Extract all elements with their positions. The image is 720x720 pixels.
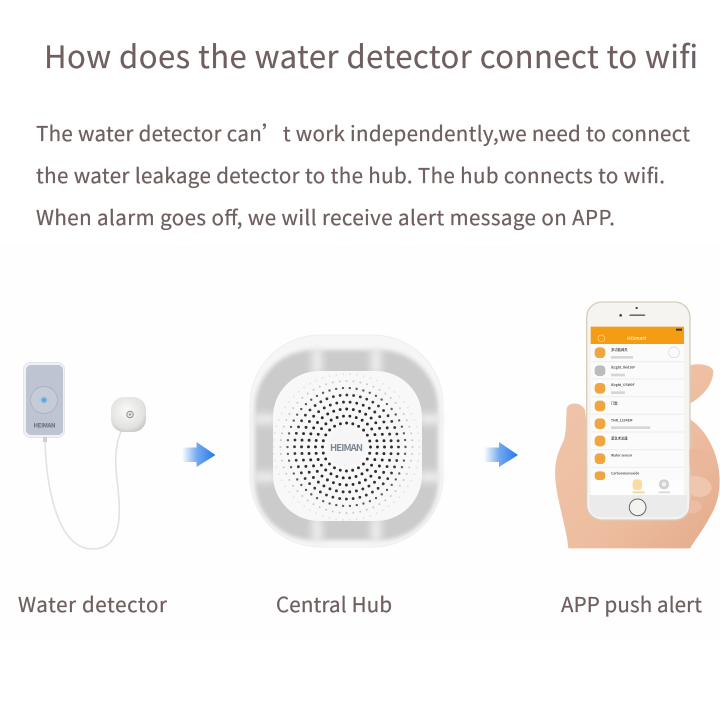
app row labels: 多功能网关 (611, 347, 628, 352)
app row labels (611, 347, 639, 475)
label: central hub: Central Hub (276, 588, 392, 618)
icon: hand holding phone with app (555, 302, 720, 548)
cable (45, 415, 130, 549)
label: app push alert: APP push alert (561, 588, 702, 618)
text block: description: the water leakage detector to the hub. The hub connects to wifi. (36, 159, 665, 189)
app row labels: iEzgbt_Ikid10F (611, 364, 635, 369)
app row labels: THR_1234EM (611, 418, 633, 423)
app list rows (591, 361, 684, 468)
arrow: detector to hub (182, 442, 216, 467)
title: How does the water detector connect to wifi (44, 32, 698, 77)
icon: water detector device (24, 362, 146, 549)
phone body (587, 302, 690, 520)
app row labels: iEzgbt_O3W0F (611, 382, 635, 387)
text block: description: When alarm goes off, we will receive alert message on APP. (36, 201, 615, 231)
phone chin (589, 495, 687, 517)
hub outer shell (250, 335, 443, 547)
text block: description: The water detector can’t work independently,we need to connect (36, 117, 690, 147)
detector body: HEIMAN (34, 420, 56, 430)
app header (591, 327, 684, 344)
hub light ring (254, 348, 441, 542)
app row labels: 紧急求总器 (611, 435, 628, 440)
app row icons (595, 347, 605, 480)
text block: description (36, 117, 690, 231)
phone screen (591, 327, 684, 495)
hub speaker plate (273, 371, 422, 521)
icon: central hub (250, 335, 443, 547)
hand (555, 364, 720, 548)
fingers over phone (689, 449, 716, 513)
phone speaker and camera (619, 307, 645, 317)
add button (669, 347, 679, 358)
app row labels: 门窗 (611, 400, 618, 405)
sensor probe (111, 397, 146, 432)
hub center logo (328, 428, 366, 466)
tab bar (591, 479, 684, 495)
phone home button (629, 499, 646, 516)
label: water detector: Water detector (18, 588, 167, 618)
detector body (24, 362, 64, 442)
app row sublabels (611, 356, 650, 429)
hub center logo: HEIMAN (330, 440, 363, 454)
phone screen: HiSmart (627, 335, 646, 342)
hub speaker holes (274, 374, 420, 520)
app row labels: Water sensor (611, 453, 633, 458)
app row labels: Carbonmonoxide (611, 470, 639, 475)
arrow: hub to app (484, 442, 518, 467)
